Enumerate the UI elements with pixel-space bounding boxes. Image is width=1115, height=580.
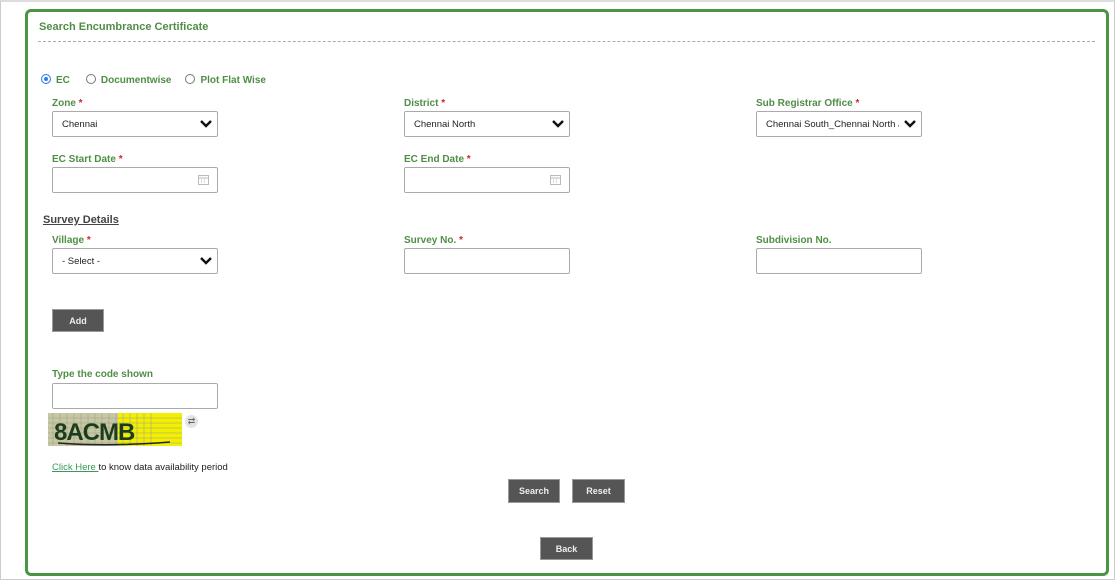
- field: ec start date: EC Start Date *: [52, 154, 123, 165]
- text: Chennai North: [414, 119, 475, 130]
- title: Search Encumbrance Certificate: [39, 21, 208, 33]
- radio options: EC Documentwise Plot Flat Wise: [56, 75, 266, 86]
- field: ec end date: EC End Date *: [404, 154, 471, 165]
- field: sub registrar office: Sub Registrar Office *: [756, 98, 859, 109]
- link text: Click Here to know data availability period: [52, 462, 228, 473]
- text: Chennai: [62, 119, 97, 130]
- field: survey no: Survey No. *: [404, 235, 463, 246]
- field: district: District *: [404, 98, 445, 109]
- field: subdivision no: Subdivision No.: [756, 235, 832, 246]
- button: back: Back: [556, 544, 577, 554]
- field: village: Village *: [52, 235, 91, 246]
- captcha image: 8ACMB: [54, 419, 135, 446]
- heading: survey details: Survey Details: [43, 214, 119, 226]
- button: add: Add: [69, 316, 87, 326]
- button: add: [52, 309, 104, 332]
- button: search: Search: [519, 486, 549, 496]
- button: reset: Reset: [586, 486, 611, 496]
- field: zone: Zone *: [52, 98, 83, 109]
- button: reset: [572, 479, 625, 503]
- icon: refresh: [185, 415, 198, 428]
- text: - Select -: [62, 256, 100, 267]
- button: back: [540, 537, 593, 560]
- captcha image: [48, 413, 182, 446]
- button: search: [508, 479, 560, 503]
- field: captcha input: Type the code shown: [52, 369, 153, 380]
- icon: refresh: ⇄: [188, 416, 195, 426]
